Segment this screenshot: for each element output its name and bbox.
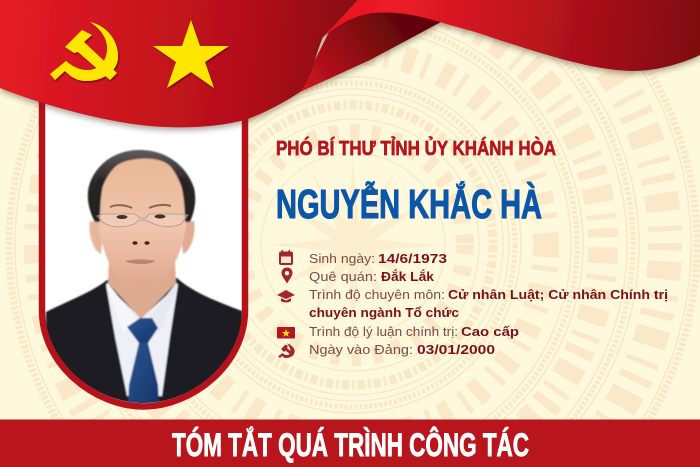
info row: party admission: Ngày vào Đảng: (309, 342, 413, 357)
info row: education: chuyên ngành Tổ chức (309, 305, 459, 320)
footer title: TÓM TẮT QUÁ TRÌNH CÔNG TÁC (172, 427, 529, 463)
heading: name: NGUYỄN KHẮC HÀ (276, 181, 542, 227)
heading: position: PHÓ BÍ THƯ TỈNH ỦY KHÁNH HÒA (276, 136, 556, 160)
info row: hometown: Đắk Lắk (381, 269, 435, 284)
portrait frame (42, 90, 245, 410)
info row: education: Cử nhân Luật; Cử nhân Chính trị (448, 287, 668, 302)
info row: party admission: 03/01/2000 (417, 342, 495, 357)
main red flag (0, 0, 358, 127)
icon: graduation cap (277, 290, 295, 302)
footer banner (0, 420, 700, 467)
info row: hometown: Quê quán: (309, 269, 377, 284)
info row: birth date: 14/6/1973 (378, 251, 447, 266)
glasses and facial features (97, 205, 188, 264)
info row: political theory: Cao cấp (461, 324, 519, 339)
info row: birth date: Sinh ngày: (309, 251, 375, 266)
icon: yellow star (153, 20, 229, 88)
icon: national flag (277, 327, 295, 338)
icon: small hammer and sickle (278, 344, 295, 358)
back ribbon dark fold (300, 10, 441, 92)
icon: calendar (279, 250, 293, 265)
info row: party admission (278, 342, 495, 358)
icon: location pin (282, 268, 292, 284)
info row: political theory: Trình độ lý luận chính trị: (309, 324, 458, 339)
info row: education: Trình độ chuyên môn: (309, 287, 445, 302)
red flag and ribbon (0, 0, 700, 127)
info row: political theory (277, 324, 519, 339)
portrait photo (46, 150, 242, 410)
info row: birth date (279, 250, 447, 266)
right red ribbon (323, 0, 700, 71)
info row: hometown (282, 268, 435, 284)
info row: education (277, 287, 668, 320)
icon: hammer and sickle (50, 22, 118, 81)
